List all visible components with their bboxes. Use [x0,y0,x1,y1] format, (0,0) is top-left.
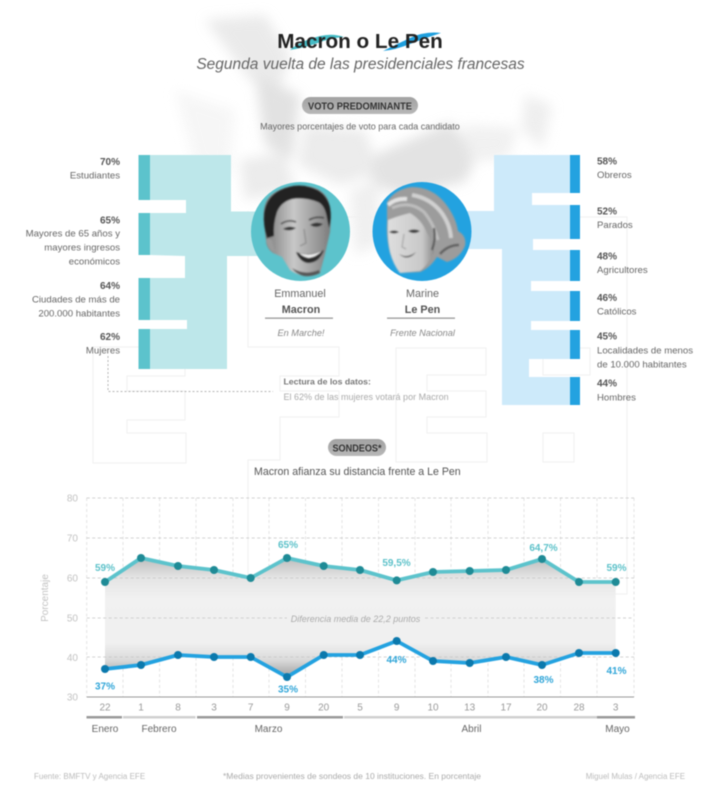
candidate caption: Macron: Emmanuel [274,288,326,300]
value labels: Macron [95,540,627,574]
left labels: Macron voters [26,157,120,356]
title text: Macron o Le Pen [277,30,443,53]
pill heading: voto predominante [302,97,418,114]
candidate caption: Macron: Macron [282,304,320,316]
y axis labels: 60 [67,574,78,584]
left labels: Macron voters: 70% [100,157,120,168]
right labels: Le Pen voters: Localidades de menos [597,346,693,356]
month labels [92,724,630,735]
portrait: Emmanuel Macron [251,182,350,281]
right labels: Le Pen voters: de 10.000 habitantes [597,360,687,370]
series: Le Pen [101,637,620,681]
average gap note: Diferencia media de 22,2 puntos [291,614,421,624]
x axis date labels: 22 [99,702,111,714]
x axis date labels: 3 [613,702,619,714]
x axis date labels: 17 [500,702,512,714]
value labels: Le Pen: 38% [533,675,554,686]
pill heading: sondeos: SONDEOS* [332,442,382,454]
month labels: Febrero [141,724,177,735]
segment bars [138,155,150,369]
reading note: Lectura de los datos: [284,376,371,386]
candidate caption: Macron: En Marche! [278,328,325,338]
footer: source: Fuente: BMFTV y Agencia EFE [34,772,145,781]
value labels: Macron: 59% [95,563,115,574]
candidate caption: Macron [265,288,333,338]
x axis date labels: 3 [211,702,217,714]
candidate caption: Le Pen [387,288,456,338]
chart subtitle: Macron afianza su distancia frente a Le Pen [254,466,461,478]
right labels: Le Pen voters: 44% [597,378,617,390]
segment bars [570,155,580,405]
gap area [105,558,616,677]
y axis labels: 40 [67,653,78,664]
left labels: Macron voters: 64% [100,281,120,292]
right labels: Le Pen voters: 58% [597,156,617,168]
right labels: Le Pen voters: Hombres [597,392,636,404]
sankey: Macron [138,155,262,369]
dotted leader line [108,356,273,392]
title [277,30,443,53]
value labels: Macron: 59% [606,563,627,574]
value labels: Le Pen [95,655,627,696]
sankey: Le Pen [460,155,580,405]
left labels: Macron voters: mayores ingresos [44,242,120,254]
right labels: Le Pen voters: 48% [597,252,617,262]
left labels: Macron voters: 200.000 habitantes [38,308,120,320]
reading note [284,376,449,402]
x axis date labels: 9 [284,702,290,714]
month bars [86,716,635,718]
x axis date labels: 10 [427,702,439,714]
flow band [150,155,262,369]
left labels: Macron voters: 65% [100,216,120,226]
value labels: Macron: 59,5% [382,558,411,569]
series: Macron [101,554,620,586]
footer: note: *Medias provenientes de sondeos de 10 instituciones. En porcentaje [223,771,481,781]
x axis date labels: 20 [318,702,330,714]
y axis labels [67,494,78,704]
pill heading: voto predominante: VOTO PREDOMINANTE [308,100,412,112]
x axis date labels: 7 [248,702,254,714]
reading note: El 62% de las mujeres votará por Macron [284,392,449,402]
left labels: Macron voters: Mujeres [86,346,120,356]
right labels: Le Pen voters: Católicos [597,306,637,318]
portrait: Marine Le Pen [372,182,472,281]
footer: credit: Miguel Mulas / Agencia EFE [586,772,685,781]
right labels: Le Pen voters: 52% [597,206,617,218]
x axis date labels: 5 [357,702,363,714]
section description: Mayores porcentajes de voto para cada candidato [260,122,460,132]
value labels: Le Pen: 35% [278,684,298,696]
title swoosh: Le Pen [383,33,441,51]
y axis title: Porcentaje [40,574,51,622]
y axis labels: 70 [67,534,78,544]
x axis date labels: 9 [394,702,400,714]
candidate caption: Le Pen: Le Pen [405,304,440,316]
title swoosh: Macron [290,35,344,50]
value labels: Macron: 65% [278,540,298,551]
right labels: Le Pen voters [597,156,693,404]
left labels: Macron voters: Mayores de 65 años y [26,228,120,240]
y axis labels: 80 [67,494,78,504]
value labels: Le Pen: 41% [606,666,627,677]
y axis labels: 30 [67,692,78,704]
month labels: Abril [461,724,482,735]
value labels: Le Pen: 44% [386,655,407,666]
month labels: Enero [92,724,119,735]
x axis date labels [99,702,619,714]
right labels: Le Pen voters: Agricultores [597,265,648,276]
month labels: Marzo [255,724,283,735]
background: EFE watermark outlines [93,211,627,594]
candidate caption: Le Pen: Frente Nacional [390,328,456,338]
y axis labels: 50 [67,614,78,624]
right labels: Le Pen voters: Obreros [597,170,632,181]
left labels: Macron voters: Ciudades de más de [32,294,120,306]
right labels: Le Pen voters: 45% [597,332,617,342]
candidate caption: Le Pen: Marine [406,288,439,300]
left labels: Macron voters: 62% [100,332,120,343]
x axis date labels: 28 [573,702,585,714]
x axis [87,696,634,698]
x axis date labels: 20 [536,702,548,714]
x axis date labels: 1 [138,702,144,714]
subtitle: Segunda vuelta de las presidenciales francesas [196,56,525,73]
pill heading: sondeos [328,439,386,456]
value labels: Macron: 64,7% [529,543,558,554]
left labels: Macron voters: económicos [69,256,120,268]
left labels: Macron voters: Estudiantes [70,170,120,182]
value labels: Le Pen: 37% [95,682,115,692]
background: smoke photo [175,15,552,255]
right labels: Le Pen voters: Parados [597,220,633,231]
grid [87,498,634,697]
x axis date labels: 8 [175,702,181,714]
right labels: Le Pen voters: 46% [597,293,617,304]
line chart: polls [40,494,635,735]
x axis date labels: 13 [464,702,476,714]
month labels: Mayo [605,724,630,735]
flow band [460,155,570,405]
